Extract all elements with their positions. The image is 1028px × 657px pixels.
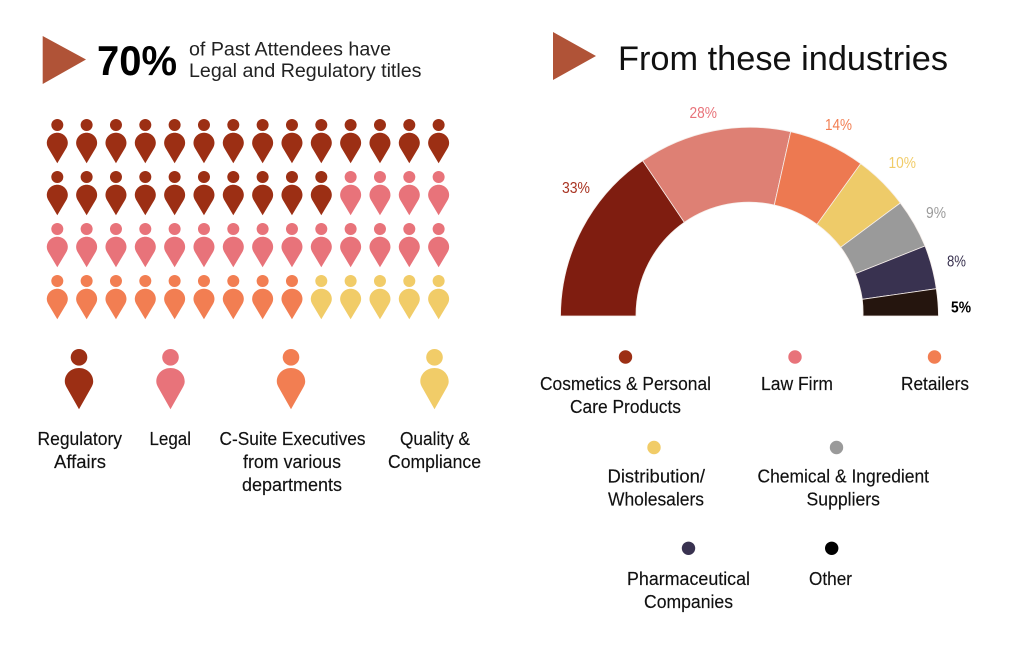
heading: from these industries: From these industries	[618, 40, 948, 78]
legend item: distribution	[608, 441, 705, 510]
legend: quality and compliance: Compliance	[388, 452, 481, 472]
row 1: regulatory affairs	[47, 119, 449, 163]
row 4: c-suite and quality	[47, 275, 449, 319]
segment: pharmaceutical 8%	[855, 246, 936, 299]
legend item: pharmaceutical	[627, 542, 750, 612]
heading: 70% of past attendees	[97, 37, 422, 84]
legend: c-suite executives: departments	[242, 475, 342, 495]
segment: cosmetics 33%	[560, 161, 684, 316]
legend item: other: Other	[809, 569, 852, 589]
legend item: pharmaceutical: Pharmaceutical	[627, 569, 750, 589]
row 3: legal	[47, 223, 449, 267]
percentage labels: 33%	[562, 180, 590, 197]
legend item: other	[809, 542, 852, 589]
legend item: law firm: Law Firm	[761, 374, 833, 394]
legend: regulatory affairs: Affairs	[54, 452, 106, 472]
percentage labels	[562, 105, 971, 317]
legend: regulatory affairs	[38, 349, 122, 472]
heading: 70% of past attendees: Legal and Regulatory titles	[189, 61, 422, 82]
pictogram: attendee people grid	[47, 119, 449, 319]
icon: right heading triangle	[553, 32, 596, 80]
percentage labels: 8%	[947, 254, 966, 270]
percentage labels: 5%	[951, 300, 971, 317]
legend item: chemical: Suppliers	[806, 490, 880, 510]
legend item: distribution: Wholesalers	[608, 490, 704, 510]
legend item: retailers: Retailers	[901, 374, 969, 394]
legend item: retailers	[901, 350, 969, 394]
segment: chemical 9%	[841, 203, 925, 274]
legend: c-suite executives: from various	[243, 452, 341, 472]
percentage labels: 14%	[825, 117, 852, 134]
legend item: chemical	[758, 441, 929, 510]
heading: 70% of past attendees: of Past Attendees have	[189, 40, 391, 60]
legend item: cosmetics: Care Products	[570, 397, 681, 417]
legend item: cosmetics	[540, 350, 711, 417]
legend item: chemical: Chemical & Ingredient	[758, 467, 929, 487]
segment: law firm 28%	[643, 127, 791, 222]
segment: other 5%	[862, 289, 938, 316]
icon: left heading triangle	[43, 36, 86, 84]
percentage labels: 9%	[926, 205, 946, 222]
percentage labels: 10%	[888, 155, 916, 172]
chart: industries semicircle	[560, 127, 938, 316]
legend item: law firm	[761, 350, 833, 394]
legend: quality and compliance: Quality &	[400, 429, 470, 449]
legend: c-suite executives: C-Suite Executives	[220, 429, 366, 449]
percentage labels: 28%	[690, 105, 717, 122]
legend: legal	[150, 349, 191, 449]
legend item: pharmaceutical: Companies	[644, 592, 733, 612]
row 2: regulatory affairs and legal	[47, 171, 449, 215]
segment: retailers 14%	[774, 132, 861, 224]
segment: distribution 10%	[817, 164, 900, 247]
legend: regulatory affairs: Regulatory	[38, 429, 122, 449]
legend: c-suite executives	[220, 349, 366, 495]
legend item: distribution: Distribution/	[608, 467, 705, 487]
legend: legal: Legal	[150, 429, 191, 449]
legend item: cosmetics: Cosmetics & Personal	[540, 374, 711, 394]
legend: quality and compliance	[388, 349, 481, 472]
heading: 70% of past attendees: 70%	[97, 37, 177, 84]
